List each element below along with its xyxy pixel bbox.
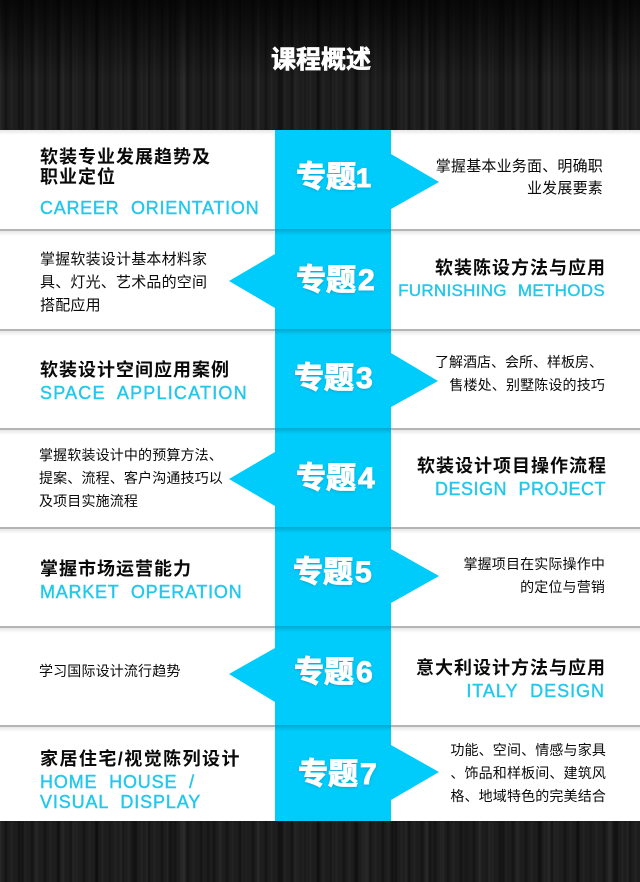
row 6 background	[0, 628, 640, 725]
panel: topic 1	[40, 147, 603, 218]
panel: topic 5: 掌握项目在实际操作中	[464, 556, 605, 572]
panel: topic 4	[39, 447, 607, 509]
row 1 background	[0, 130, 640, 229]
panel: topic 6: 学习国际设计流行趋势	[39, 663, 180, 679]
panel: topic 2: 掌握软装设计基本材料家	[40, 251, 207, 268]
panel: topic 2: FURNISHING METHODS	[398, 281, 605, 300]
panel: topic 5: 专题5	[293, 556, 372, 589]
row 4 background	[0, 430, 640, 527]
panel: topic 6: ITALY DESIGN	[466, 681, 605, 701]
panel: topic 1: 职业定位	[40, 167, 116, 187]
panel: topic 2	[40, 251, 606, 314]
panel: topic 4: DESIGN PROJECT	[435, 479, 606, 499]
textured background top	[0, 0, 640, 132]
panel: topic 5: 掌握市场运营能力	[40, 559, 192, 579]
row 5 background	[0, 529, 640, 626]
panel: topic 7: 、饰品和样板间、建筑风	[450, 765, 606, 781]
panel: topic 4: 掌握软装设计中的预算方法、	[39, 447, 223, 463]
panel: topic 2: 软装陈设方法与应用	[435, 258, 606, 278]
panel: topic 7: 格、地域特色的完美结合	[450, 788, 606, 804]
panel: topic 3: 专题3	[294, 362, 373, 395]
row 7 background	[0, 727, 640, 821]
title: 课程概述	[271, 46, 371, 74]
panel: topic 1: CAREER ORIENTATION	[40, 198, 259, 218]
panel: topic 1: 业发展要素	[527, 180, 603, 197]
panel: topic 7	[40, 742, 606, 812]
central blue band	[275, 130, 391, 821]
panel: topic 1: 掌握基本业务面、明确职	[436, 158, 603, 175]
panel: topic 3: 软装设计空间应用案例	[40, 360, 230, 380]
row 3 background	[0, 331, 640, 428]
panel: topic 4: 及项目实施流程	[39, 493, 138, 509]
panel: topic 6	[39, 655, 606, 701]
row separator layer	[0, 130, 640, 821]
panel: topic 7: 家居住宅/视觉陈列设计	[40, 749, 241, 769]
panel: topic 4: 软装设计项目操作流程	[417, 456, 607, 476]
panel: topic 6: 意大利设计方法与应用	[416, 658, 606, 678]
panel: topic 1: 专题1	[296, 161, 371, 194]
panel: topic 7: HOME HOUSE /	[40, 772, 195, 792]
panel: topic 4: 专题4	[296, 462, 375, 495]
panel: topic 7: 专题7	[298, 758, 377, 791]
panel: topic 4: 提案、流程、客户沟通技巧以	[39, 470, 223, 486]
row 2 background	[0, 231, 640, 329]
panel: topic 2: 具、灯光、艺术品的空间	[40, 274, 207, 291]
panel: topic 3: 了解酒店、会所、样板房、	[435, 354, 603, 370]
panel: topic 2: 搭配应用	[40, 297, 101, 314]
panel: topic 5: 的定位与营销	[520, 579, 605, 595]
panel: topic 7: VISUAL DISPLAY	[40, 792, 201, 812]
panel: topic 3	[40, 354, 605, 403]
textured background bottom	[0, 821, 640, 882]
panel: topic 5: MARKET OPERATION	[40, 582, 242, 602]
panel: topic 7: 功能、空间、情感与家具	[450, 742, 606, 758]
panel: topic 3: 售楼处、别墅陈设的技巧	[449, 377, 605, 393]
panel: topic 3: SPACE APPLICATION	[40, 383, 248, 403]
panel: topic 1: 软装专业发展趋势及	[40, 147, 211, 167]
panel: topic 5	[40, 555, 605, 602]
panel: topic 2: 专题2	[296, 264, 375, 297]
panel: topic 6: 专题6	[294, 656, 373, 689]
